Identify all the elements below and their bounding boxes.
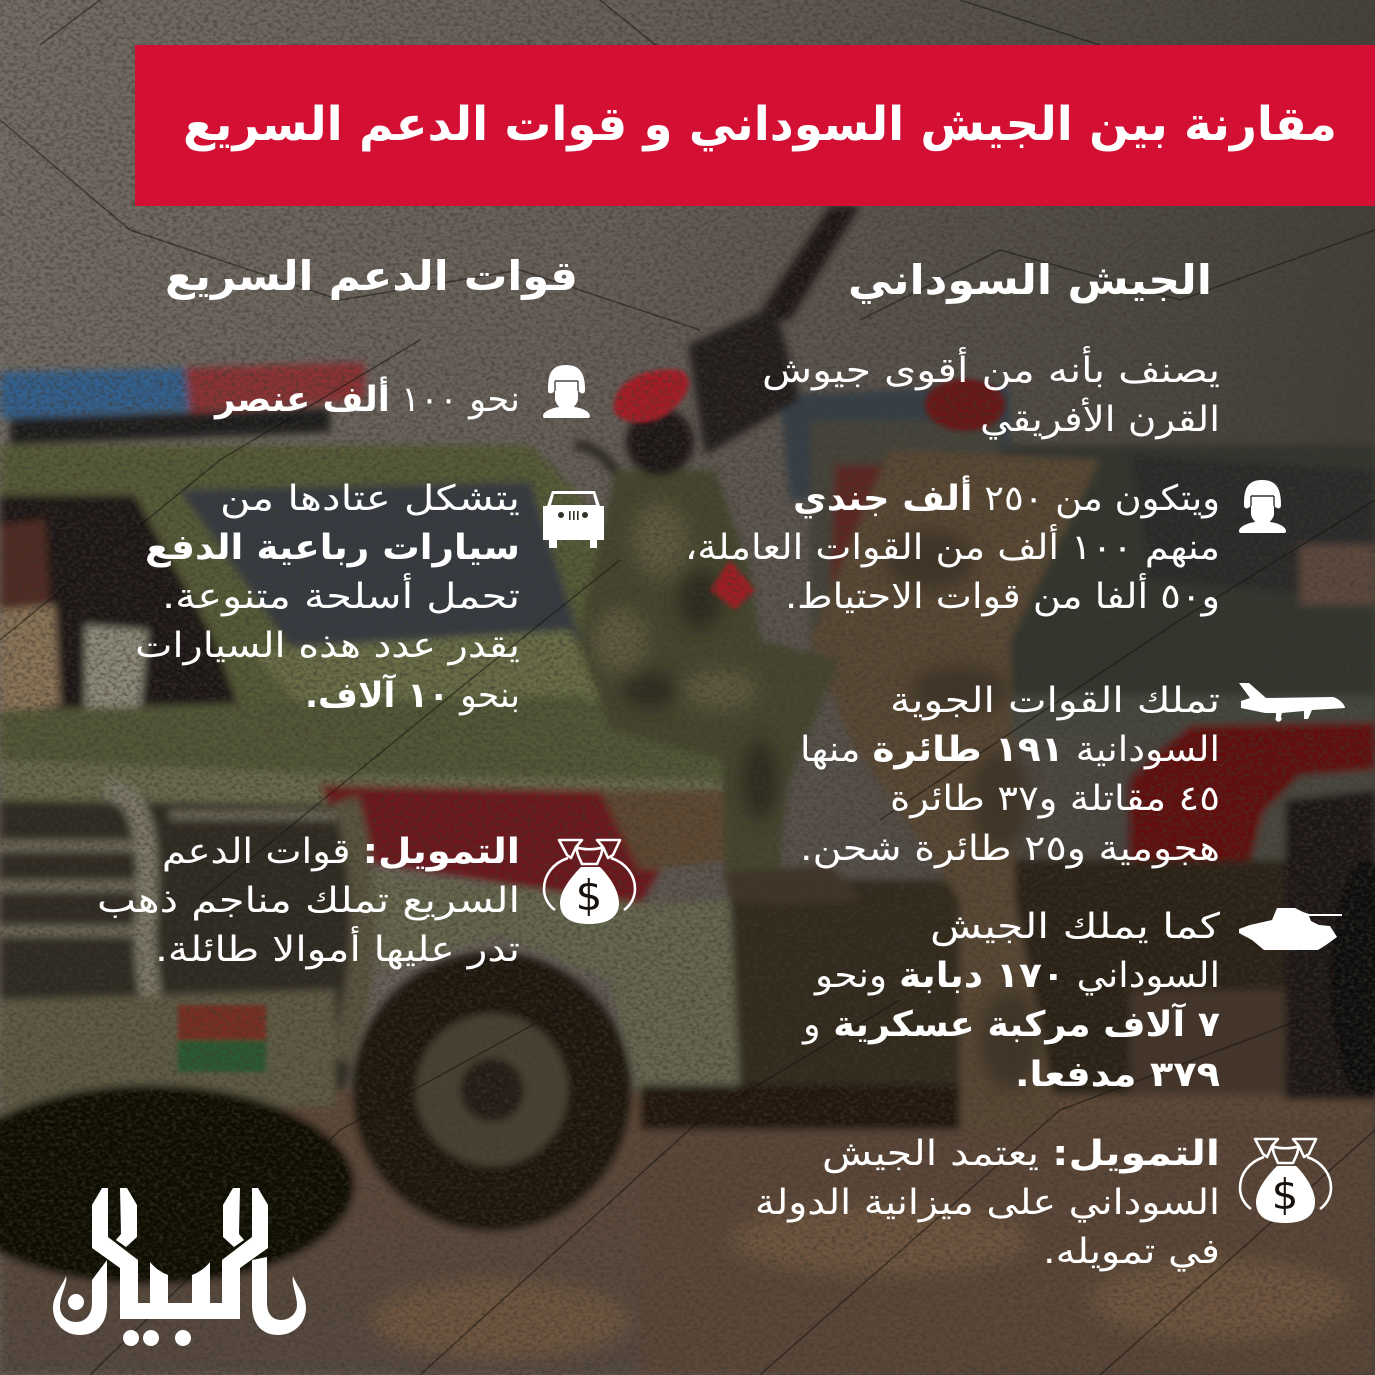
text: RSF funding: تدر عليها أموالا طائلة. <box>155 926 520 970</box>
text: army ranking: القرن الأفريقي <box>980 397 1220 440</box>
icon: money bag (army) <box>1240 1139 1331 1223</box>
text: armor: السوداني ١٧٠ دبابة ونحو <box>813 956 1220 996</box>
red panel right <box>1130 722 1375 860</box>
background truck right <box>780 385 1010 500</box>
second soldier <box>810 450 1100 1130</box>
text: army ranking <box>762 346 1220 440</box>
icon: soldier with helmet (army) <box>1239 480 1286 533</box>
main soldier <box>578 470 840 880</box>
text: air force: هجومية و٢٥ طائرة شحن. <box>800 829 1220 869</box>
text: army funding: في تمويله. <box>1043 1232 1220 1272</box>
beret <box>614 369 689 423</box>
text: army funding: التمويل: يعتمد الجيش <box>822 1134 1220 1174</box>
text: army funding: السوداني على ميزانية الدولة <box>755 1183 1220 1223</box>
gun <box>755 206 860 320</box>
red fender <box>320 785 660 905</box>
text: army ranking: يصنف بأنه من أقوى جيوش <box>762 346 1220 391</box>
icon: money bag (RSF): $ <box>576 871 602 920</box>
text: air force: تملك القوات الجوية <box>890 681 1220 721</box>
text: RSF funding <box>97 832 520 970</box>
icon: tank <box>1239 908 1342 950</box>
text: RSF funding: السريع تملك مناجم ذهب <box>97 881 520 921</box>
hood <box>0 695 740 800</box>
camouflage patches <box>592 502 758 710</box>
shadow under truck <box>0 1085 355 1285</box>
text: RSF vehicles: تحمل أسلحة متنوعة. <box>162 573 520 617</box>
icon: soldier with helmet (RSF) <box>543 365 590 418</box>
text: army size: منهم ١٠٠ ألف من القوات العاملة، <box>685 524 1220 568</box>
text: RSF vehicles: يقدر عدد هذه السيارات <box>135 626 520 666</box>
text: RSF size: نحو ١٠٠ ألف عنصر <box>213 376 520 420</box>
dark zone behind soldiers <box>730 880 1010 1130</box>
logo: Al Bayan <box>53 1188 306 1346</box>
icon: money bag (army): $ <box>1272 1170 1298 1219</box>
ground <box>0 1090 1375 1375</box>
title: مقارنة بين الجيش السوداني و قوات الدعم السريع <box>183 97 1337 152</box>
fender <box>370 870 740 1100</box>
text: air force <box>800 681 1220 869</box>
light bar <box>0 368 190 418</box>
heading: Rapid Support Forces: قوات الدعم السريع <box>165 252 578 300</box>
text: army size: و٥٠ ألفا من قوات الاحتياط. <box>785 573 1220 617</box>
text: armor: ٧ آلاف مركبة عسكرية و <box>801 1002 1220 1045</box>
grille and bumper <box>0 800 370 1100</box>
text: RSF vehicles: بنحو ١٠ آلاف. <box>305 673 520 716</box>
left truck roof + cab <box>0 445 700 770</box>
icon: money bag (RSF) <box>544 840 635 924</box>
title banner <box>135 45 1375 206</box>
text: RSF vehicles: يتشكل عتادها من <box>220 479 520 519</box>
text: RSF vehicles: سيارات رباعية الدفع <box>145 528 520 568</box>
text: armor: كما يملك الجيش <box>930 907 1220 947</box>
text: air force: السودانية ١٩١ طائرة منها <box>800 730 1220 770</box>
heading: Sudanese army: الجيش السوداني <box>848 256 1212 304</box>
text: army size: ويتكون من ٢٥٠ ألف جندي <box>793 475 1220 519</box>
text: air force: ٤٥ مقاتلة و٣٧ طائرة <box>890 779 1220 819</box>
text: armor: ٣٧٩ مدفعا. <box>1015 1055 1220 1095</box>
text: army size <box>685 475 1220 617</box>
text: army funding <box>755 1134 1220 1272</box>
icon: fighter jet <box>1239 683 1345 722</box>
text: RSF funding: التمويل: قوات الدعم <box>162 832 520 872</box>
icon: jeep <box>543 491 604 548</box>
text: armor <box>801 907 1220 1095</box>
text: RSF vehicles <box>135 479 520 716</box>
wheel <box>352 952 632 1232</box>
